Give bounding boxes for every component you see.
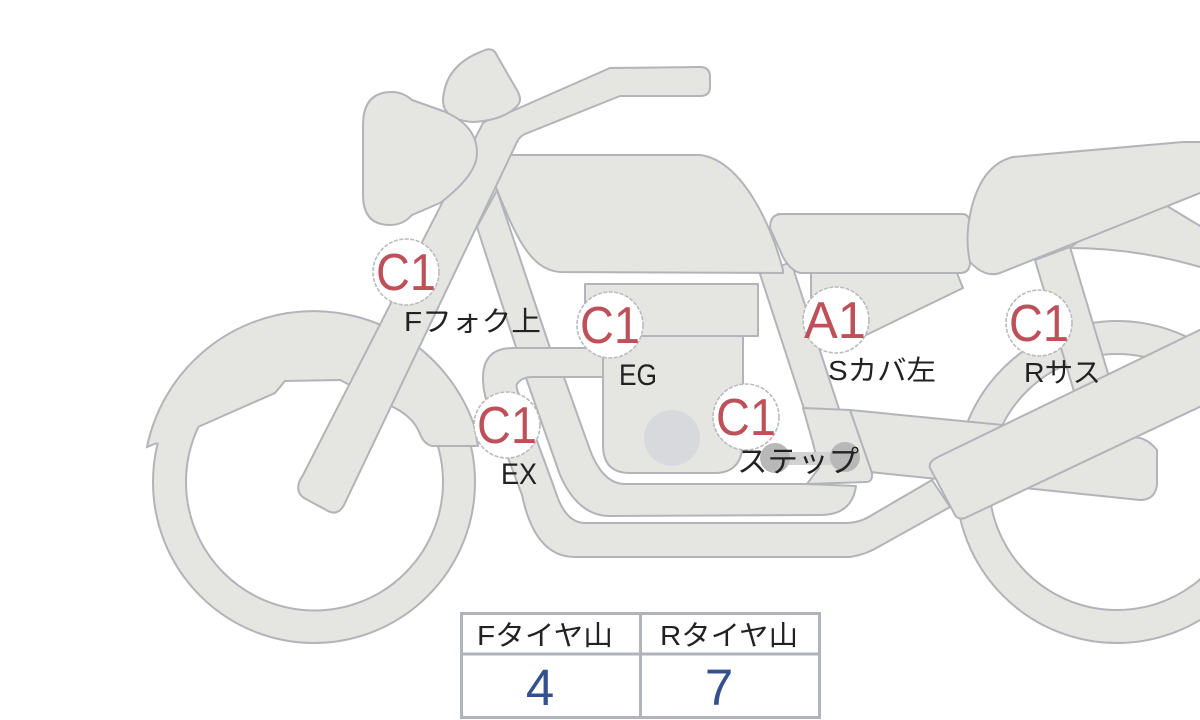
motorcycle silhouette [147, 49, 1200, 643]
label: engine: EG [619, 359, 657, 392]
marker: exhaust C1: C1 [477, 397, 537, 455]
label: front fork: Fフォク上 [404, 306, 541, 337]
rear fender [1070, 206, 1200, 270]
value: front tread: 4 [526, 659, 554, 716]
engine head [585, 284, 758, 336]
label: rear suspension: Rサス [1024, 357, 1101, 388]
header: front tread: Fタイヤ山 [477, 620, 613, 651]
label: exhaust: EX [501, 458, 537, 491]
step bar [760, 442, 860, 473]
fuel tank [495, 155, 783, 273]
step plate [803, 408, 872, 484]
engine body [603, 336, 743, 473]
marker: engine C1: C1 [580, 297, 640, 355]
meter [443, 49, 520, 122]
rear wheel [956, 321, 1200, 643]
swingarm [850, 410, 1157, 500]
header: rear tread: Rタイヤ山 [660, 620, 798, 651]
lower frame [477, 190, 856, 516]
label: step: ステップ [737, 446, 859, 479]
value: rear tread: 7 [705, 659, 733, 716]
marker: front fork C1: C1 [376, 244, 436, 302]
exhaust pipe and muffler tube [483, 348, 950, 557]
label: side cover left: Sカバ左 [828, 355, 936, 386]
engine cover disc [644, 410, 700, 466]
muffler [930, 325, 1200, 519]
fork and handlebar [298, 67, 710, 513]
marker: side cover A1: A1 [804, 292, 866, 350]
front wheel and fender [147, 311, 478, 643]
tail cowl [968, 142, 1200, 274]
headlight [363, 92, 477, 225]
rear frame tube [760, 262, 840, 412]
marker: step C1: C1 [716, 389, 776, 447]
seat [770, 214, 970, 273]
rear shock [1035, 247, 1110, 395]
marker: rear suspension C1: C1 [1009, 295, 1069, 353]
side cover [811, 273, 963, 338]
tire tread table [461, 613, 820, 718]
